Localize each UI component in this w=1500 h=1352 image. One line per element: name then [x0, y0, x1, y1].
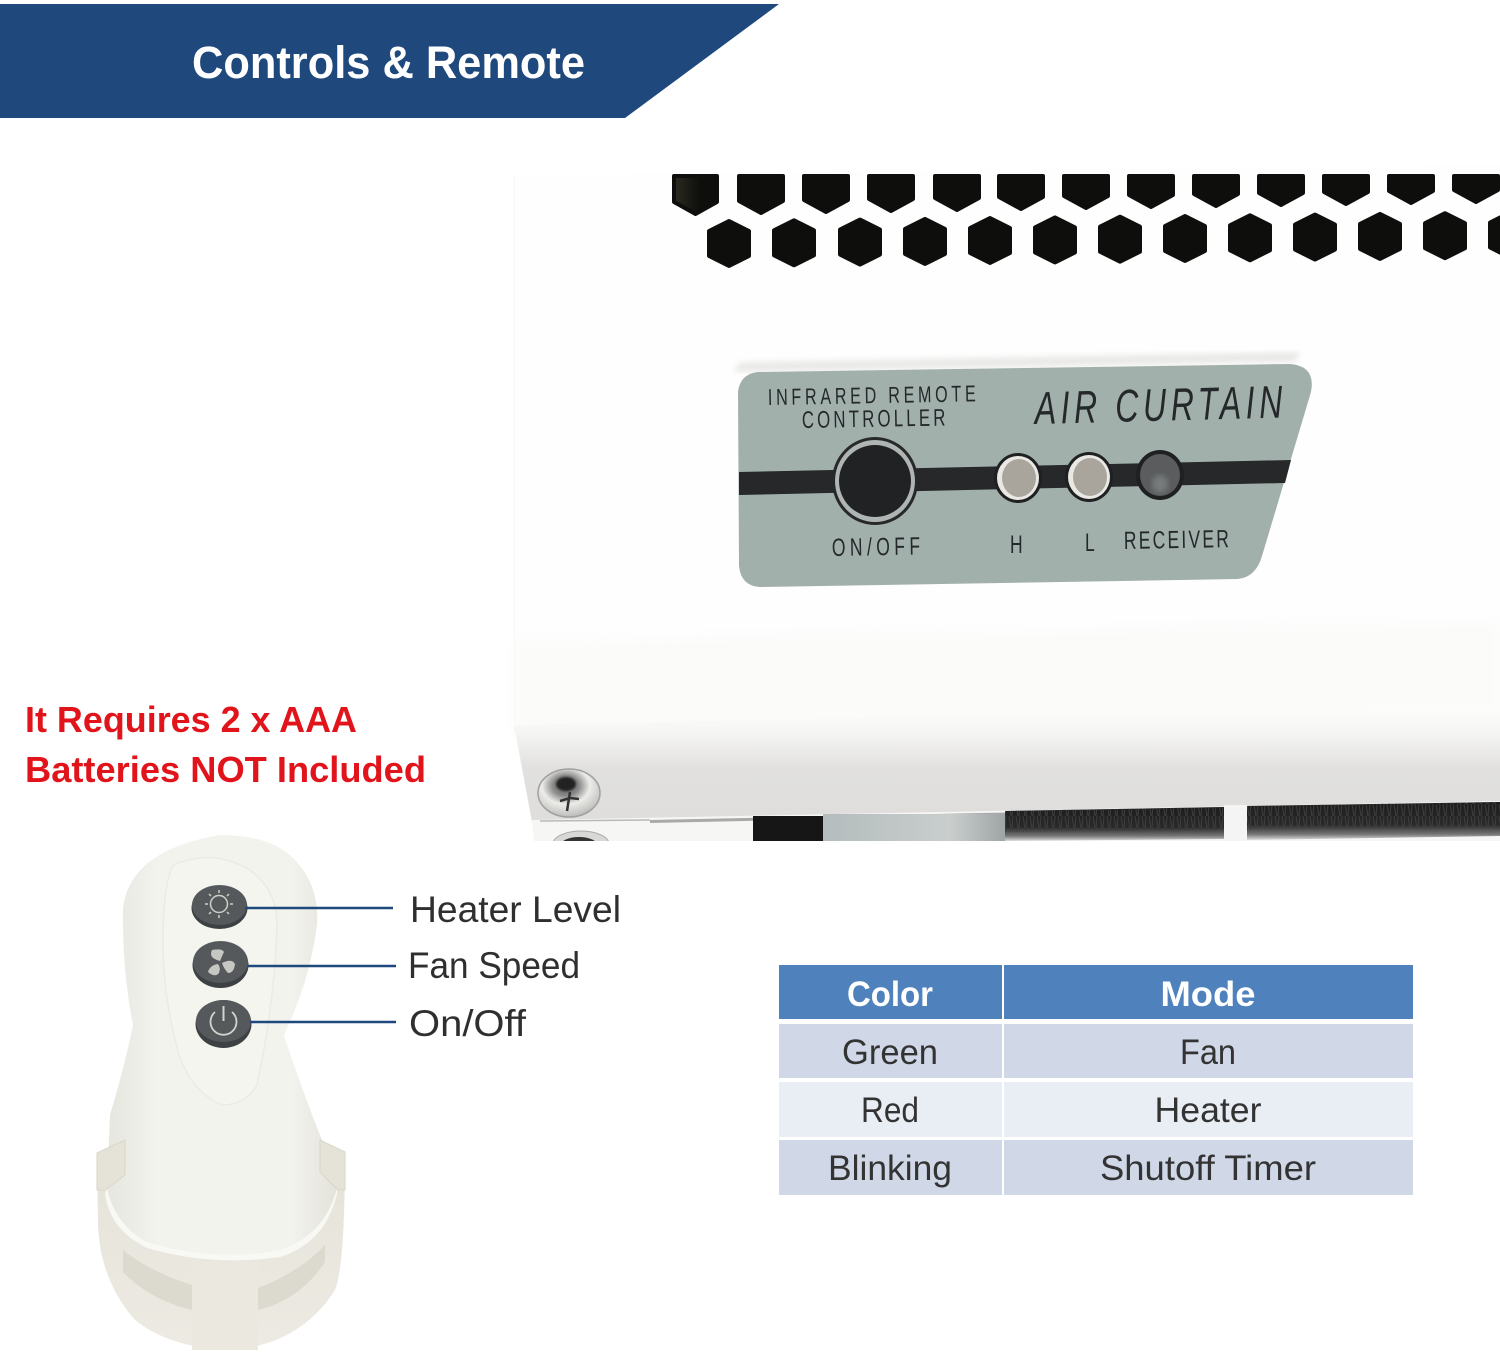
- title banner: [0, 4, 779, 118]
- plate text: [768, 377, 1283, 562]
- unit body: [514, 165, 1500, 841]
- on/off button: [832, 437, 918, 525]
- L indicator: [1065, 452, 1113, 502]
- battery notice: It Requires 2 x AAA: [25, 699, 357, 740]
- lower opening with brushes: [753, 802, 1500, 841]
- plate text: H: [1010, 530, 1023, 559]
- remote body: [107, 835, 337, 1254]
- button panel outline: [163, 858, 277, 1105]
- battery notice: Batteries NOT Included: [25, 749, 426, 790]
- row: green: Green: [842, 1033, 938, 1072]
- plate text: CONTROLLER: [802, 405, 946, 434]
- power button: [196, 1000, 252, 1048]
- H indicator: [994, 453, 1042, 503]
- table header: Mode: [1160, 975, 1256, 1014]
- side clips: [97, 1140, 125, 1190]
- plate text: INFRARED REMOTE: [768, 382, 976, 411]
- dark band: [739, 460, 1291, 495]
- screws: [537, 768, 609, 841]
- row: green: [779, 1024, 1413, 1078]
- callout lines: [245, 908, 396, 1022]
- plate text: ON/OFF: [832, 531, 920, 562]
- heater button: [192, 885, 248, 929]
- row: red: Heater: [1154, 1091, 1262, 1130]
- title: Controls & Remote: [192, 37, 585, 88]
- plate text: L: [1085, 528, 1095, 557]
- callout labels: Heater Level: [410, 889, 621, 930]
- control label plate: [738, 364, 1312, 587]
- row: blinking: [779, 1140, 1413, 1195]
- plate text: RECEIVER: [1124, 524, 1229, 555]
- battery notice: [25, 699, 426, 790]
- row: red: [779, 1082, 1413, 1137]
- row: blinking: Shutoff Timer: [1100, 1149, 1316, 1188]
- table header: [779, 965, 1413, 1019]
- callout labels: Fan Speed: [408, 945, 580, 986]
- label recess shading: [734, 352, 1300, 372]
- callout labels: On/Off: [409, 1003, 527, 1044]
- receiver: [1136, 450, 1184, 500]
- callout labels: [408, 889, 621, 1044]
- mode table: [779, 965, 1413, 1195]
- vent holes: [674, 176, 1500, 266]
- row: blinking: Blinking: [828, 1149, 952, 1188]
- row: red: Red: [861, 1091, 919, 1130]
- remote base: [97, 1152, 345, 1350]
- photo: remote control: [97, 835, 345, 1350]
- row: green: Fan: [1180, 1033, 1236, 1072]
- table header: Color: [847, 975, 933, 1014]
- plate text: AIR CURTAIN: [1032, 377, 1283, 434]
- fan button: [192, 941, 248, 988]
- photo: air curtain unit: [514, 165, 1500, 857]
